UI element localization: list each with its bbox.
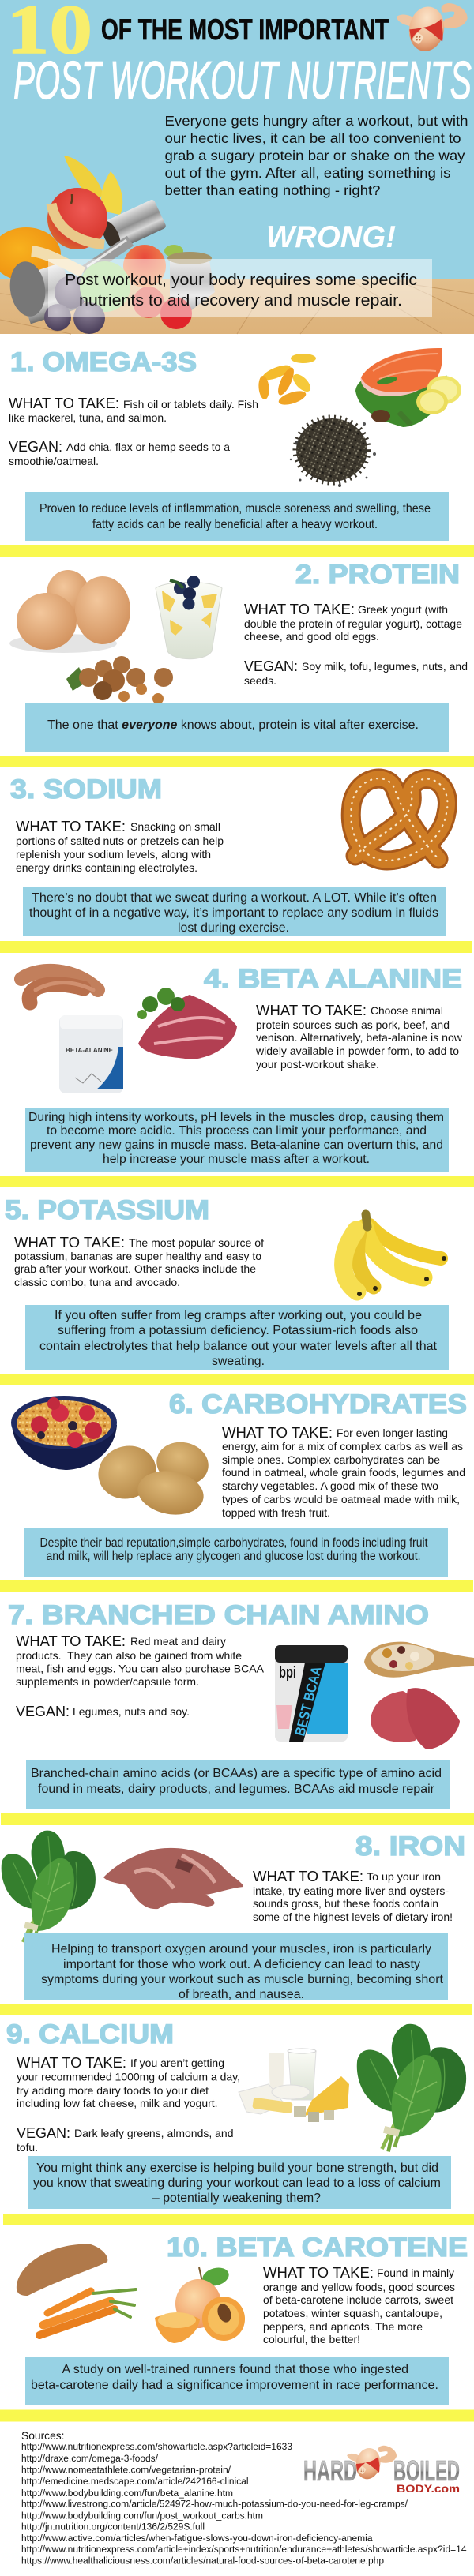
- panel: 9 calcium: [6, 2019, 466, 2209]
- what to take text: your recommended 1000mg of calcium a day,: [17, 2070, 240, 2083]
- callout: beta alanine benefit: help increase your muscle mass after a workout.: [103, 1153, 370, 1166]
- what to take text: Soy milk, tofu, legumes, nuts, and: [302, 660, 468, 673]
- what to take text: [263, 2265, 455, 2345]
- logo: hard boiled body: BODY.com: [397, 2482, 460, 2495]
- what to take text: try adding more dairy foods to your diet: [17, 2084, 209, 2097]
- what to take text: WHAT TO TAKE:: [17, 2055, 126, 2071]
- what to take text: potassium, bananas are super healthy and easy to: [14, 1250, 261, 1262]
- sources list: Sources:: [21, 2429, 65, 2442]
- what to take text: some of the highest levels of dietary iron!: [253, 1910, 453, 1923]
- what to take text: seeds.: [244, 674, 276, 687]
- sources list: http://www.nutritionexpress.com/showarticle.aspx?articleid=1633: [21, 2443, 292, 2452]
- what to take text: double the protein of regular yogurt), cottage: [244, 617, 462, 630]
- callout: iron benefit: Helping to transport oxygen around your muscles, iron is particularly: [51, 1942, 431, 1956]
- sources list: http://jn.nutrition.org/content/136/2/529S.full: [21, 2523, 205, 2533]
- what to take text: VEGAN:: [17, 2125, 70, 2141]
- callout: potassium benefit: suffering from a potassium deficiency. Potassium-rich foods also: [58, 1324, 418, 1337]
- what to take text: For even longer lasting: [337, 1427, 448, 1439]
- what to take text: WHAT TO TAKE:: [253, 1869, 363, 1884]
- heading: carbohydrates: 6. CARBOHYDRATES: [169, 1389, 467, 1419]
- panel: 7 branched chain amino: [8, 1600, 474, 1809]
- sources list: http://www.active.com/articles/when-fatigue-slows-you-down-iron-deficiency-anemia: [21, 2534, 373, 2544]
- callout: iron benefit: symptoms during your workout such as muscle burning, becoming short: [41, 1973, 444, 1986]
- what to take text: found in oatmeal, whole grain foods, legumes and: [222, 1466, 465, 1479]
- intro paragraph: better than eating nothing - right?: [164, 182, 381, 198]
- intro paragraph: out of the gym. After all, eating something is: [164, 165, 451, 181]
- callout: potassium benefit: [25, 1305, 449, 1370]
- what to take text: [14, 1235, 264, 1288]
- what to take text: topped with fresh fruit.: [222, 1506, 330, 1519]
- panel: 3 sodium: [10, 774, 447, 936]
- what to take text: simple ones. Complex carbohydrates can be: [222, 1453, 440, 1466]
- panel: 2 protein: [9, 560, 468, 752]
- what to take text: including low fat cheese, milk and yogurt.: [17, 2097, 218, 2109]
- icon: spoon of legumes: [364, 1642, 474, 1678]
- icon: fruit granola bowl: [11, 1396, 117, 1470]
- what to take text: colourful, the better!: [263, 2333, 360, 2345]
- what to take text: widely available in powder form, to add to: [255, 1044, 459, 1057]
- what to take text: [17, 2055, 240, 2154]
- what to take text: protein sources such as pork, beef, and: [256, 1018, 450, 1031]
- what to take text: To up your iron: [367, 1870, 441, 1883]
- what to take text: WHAT TO TAKE:: [16, 1633, 126, 1649]
- icon: red meat with parsley: [137, 988, 237, 1059]
- callout: beta alanine benefit: prevent any new gains in muscle mass. Beta-alanine can overturn this, and: [30, 1138, 443, 1152]
- icon: raw beef: [371, 1688, 460, 1749]
- heading: beta alanine: 4. BETA ALANINE: [204, 964, 462, 994]
- heading: calcium: 9. CALCIUM: [6, 2019, 174, 2049]
- what to take text: [253, 1869, 453, 1923]
- title line: of the most important: OF THE MOST IMPORTANT: [101, 13, 389, 46]
- heading: sodium: 3. SODIUM: [10, 774, 162, 804]
- what to take text: Red meat and dairy: [130, 1635, 226, 1648]
- icon: BCAA supplement tub: BEST BCAA: [292, 1665, 325, 1738]
- what to take text: products. They can also be gained from white: [16, 1649, 242, 1662]
- what to take text: Dark leafy greens, almonds, and: [74, 2127, 234, 2139]
- what to take text: [255, 1003, 463, 1071]
- sources list: http://www.nutritionexpress.com/article+index/sports+nutrition/endurance+athletes/showarticle.aspx?id=14: [21, 2545, 467, 2555]
- what to take text: types of carbs would be oatmeal made with milk,: [222, 1493, 460, 1505]
- what to take text: Legumes, nuts and soy.: [73, 1705, 190, 1718]
- logo: hard boiled body: [303, 2446, 460, 2495]
- intro paragraph: [164, 113, 468, 198]
- callout: beta carotene benefit: A study on well-trained runners found that those who ingested: [62, 2363, 408, 2376]
- callout: BCAA benefit: found in meats, dairy products, and legumes. BCAAs aid muscle repair: [38, 1783, 434, 1796]
- callout: omega-3 benefit: fatty acids can be really beneficial after a heavy workout.: [92, 518, 378, 531]
- callout: iron benefit: of breath, and nausea.: [179, 1988, 304, 2001]
- sources list: http://www.nomeatathlete.com/vegetarian-protein/: [21, 2466, 231, 2476]
- icon: sausages: [21, 971, 98, 1003]
- what to take text: [222, 1425, 465, 1519]
- icon: BCAA supplement tub: [275, 1645, 348, 1742]
- panel: header: [0, 0, 474, 334]
- what to take text: smoothie/oatmeal.: [9, 455, 99, 467]
- callout: calcium benefit: you know that sweating during your workout can lead to a loss of calcium: [33, 2177, 441, 2190]
- what to take text: WHAT TO TAKE:: [14, 1235, 125, 1251]
- what to take text: orange and yellow foods, good sources: [263, 2281, 455, 2293]
- callout: sodium benefit: lost during exercise.: [178, 921, 289, 935]
- what to take text: WHAT TO TAKE:: [263, 2265, 374, 2281]
- what to take text: [9, 396, 258, 467]
- callout: potassium benefit: contain electrolytes that help balance out your water levels after all that: [40, 1340, 438, 1353]
- what to take text: WHAT TO TAKE:: [244, 602, 355, 617]
- what to take text: VEGAN:: [9, 439, 62, 455]
- what to take text: If you aren’t getting: [130, 2057, 224, 2069]
- what to take text: Fish oil or tablets daily. Fish: [123, 398, 258, 411]
- heading: protein: 2. PROTEIN: [295, 560, 460, 590]
- icon: beta-alanine powder tub: [59, 1015, 123, 1093]
- what to take text: WHAT TO TAKE:: [256, 1003, 367, 1018]
- what to take text: Add chia, flax or hemp seeds to a: [66, 441, 230, 453]
- panel: 8 iron: [2, 1831, 465, 2001]
- heading: potassium: 5. POTASSIUM: [5, 1195, 209, 1225]
- what to take text: replenish your sodium levels, along with: [16, 848, 211, 861]
- illustration: fruit and dumbbells: [0, 156, 215, 334]
- what to take text: energy drinks containing electrolytes.: [16, 861, 198, 874]
- icon: potatoes: [91, 1438, 213, 1520]
- callout: iron benefit: important for those who work out. A deficiency can lead to nasty: [63, 1958, 420, 1971]
- panel: 6 carbohydrates: [11, 1389, 467, 1577]
- callout: BCAA benefit: Branched-chain amino acids (or BCAAs) are a specific type of amino acid: [31, 1767, 442, 1780]
- translucent message box: nutrients to aid recovery and muscle repair.: [79, 292, 402, 309]
- callout: carbohydrates benefit: Despite their bad reputation,simple carbohydrates, found in foods including fruit: [40, 1536, 428, 1550]
- what to take text: energy, aim for a mix of complex carbs as well as: [222, 1440, 463, 1453]
- icon: eggs: [9, 570, 130, 653]
- icon: dairy products: [239, 2049, 349, 2122]
- what to take text: cheese, and good old eggs.: [244, 630, 379, 643]
- callout: potassium benefit: If you often suffer from leg cramps after working out, you could be: [55, 1309, 422, 1322]
- icon: beta-alanine powder tub: BETA-ALANINE: [66, 1046, 113, 1054]
- what to take text: grab after your workout. Other snacks include the: [14, 1262, 256, 1275]
- icon: raw liver: [103, 1848, 243, 1909]
- icon: apricots: [155, 2265, 248, 2344]
- what to take text: supplements in powder/capsule form.: [16, 1675, 199, 1688]
- sources list: [21, 2429, 467, 2566]
- what to take text: Snacking on small: [130, 820, 220, 833]
- intro paragraph: our hectic lives, it can be all too convenient to: [164, 130, 461, 146]
- callout: sodium benefit: There’s no doubt that we sweat during a workout. A LOT. While it’s often: [32, 891, 437, 905]
- callout: calcium benefit: – potentially weakening them?: [152, 2192, 321, 2205]
- icon: BCAA supplement tub: bpi: [279, 1664, 296, 1682]
- callout: iron benefit: [24, 1933, 448, 2001]
- sources list: http://emedicine.medscape.com/article/242166-clinical: [21, 2477, 248, 2487]
- what to take text: [16, 819, 224, 874]
- what to take text: venison. Alternatively, beta-alanine is now: [256, 1031, 463, 1044]
- icon: spinach bunch: [2, 1831, 96, 1944]
- what to take text: Choose animal: [371, 1004, 443, 1017]
- callout: sodium benefit: [23, 887, 446, 936]
- what to take text: starchy vegetables. A good mix of these two: [222, 1479, 438, 1492]
- what to take text: your post-workout shake.: [256, 1058, 379, 1071]
- intro paragraph: grab a sugary protein bar or shake on the way: [164, 148, 465, 163]
- callout: carbohydrates benefit: [24, 1528, 448, 1577]
- what to take text: Found in mainly: [377, 2267, 454, 2279]
- sources list: https://www.healthaliciousness.com/articles/natural-food-sources-of-beta-carotene.php: [21, 2556, 384, 2566]
- what to take text: sounds gross, but these foods contain: [253, 1897, 438, 1910]
- sources list: http://draxe.com/omega-3-foods/: [21, 2454, 159, 2464]
- callout: carbohydrates benefit: and milk, will help replace any glycogen and glucose lost during the workout.: [46, 1550, 420, 1563]
- callout: beta alanine benefit: [25, 1108, 449, 1172]
- callout: beta carotene benefit: beta-carotene daily had a significance improvement in race performance.: [31, 2379, 438, 2392]
- icon: yogurt glass: [156, 576, 222, 659]
- icon: walnuts: [66, 656, 173, 704]
- callout: beta alanine benefit: During high intensity workouts, pH levels in the muscles drop, causing them: [28, 1111, 444, 1124]
- sources list: http://www.bodybuilding.com/fun/post_workout_carbs.htm: [21, 2512, 263, 2522]
- callout: BCAA benefit: [26, 1760, 450, 1809]
- panel: 10 beta carotene: [17, 2233, 468, 2405]
- callout: omega-3 benefit: Proven to reduce levels of inflammation, muscle soreness and swelling, these: [40, 502, 431, 516]
- what to take text: of beta-carotene include carrots, sweet: [263, 2293, 453, 2306]
- what to take text: WHAT TO TAKE:: [222, 1425, 333, 1441]
- callout: protein benefit: The one that everyone knows about, protein is vital after exercise.: [47, 718, 419, 732]
- icon: salmon steak with lemon: [356, 348, 461, 427]
- what to take text: VEGAN:: [244, 658, 298, 674]
- icon: muscle egg mascot: [397, 3, 468, 54]
- intro paragraph: Everyone gets hungry after a workout, but with: [164, 113, 468, 129]
- heading: beta carotene: 10. BETA CAROTENE: [167, 2233, 468, 2263]
- icon: chia seeds: [290, 418, 376, 487]
- what to take text: meat, fish and eggs. You can also purchase BCAA: [16, 1663, 265, 1675]
- logo: hard boiled body: HARD: [303, 2454, 357, 2487]
- panel: 4 beta alanine: [21, 964, 463, 1172]
- what to take text: like mackerel, tuna, and salmon.: [9, 411, 167, 424]
- callout: beta carotene benefit: [25, 2357, 449, 2405]
- translucent message box: [48, 259, 432, 317]
- icon: sweet potato: [17, 2244, 107, 2296]
- callout: beta alanine benefit: to become more acidic. This process can limit your performance, and: [47, 1124, 427, 1138]
- callout: potassium benefit: sweating.: [212, 1355, 265, 1368]
- panel: 1 omega-3s: [9, 347, 461, 541]
- translucent message box: Post workout, your body requires some specific: [65, 272, 417, 289]
- what to take text: classic combo, tuna and avocado.: [14, 1276, 180, 1288]
- what to take text: VEGAN:: [16, 1704, 70, 1719]
- callout: sodium benefit: thought of in a negative way, it’s important to replace any sodium in fluids: [29, 906, 438, 920]
- sources list: http://www.bodybuilding.com/fun/beta_alanine.htm: [21, 2489, 233, 2499]
- what to take text: Greek yogurt (with: [358, 603, 448, 616]
- icon: fish oil capsules: [258, 354, 316, 407]
- callout: calcium benefit: [28, 2156, 451, 2209]
- what to take text: [16, 1633, 265, 1719]
- what to take text: portions of salted nuts or pretzels can help: [16, 834, 224, 847]
- icon: carrots: [40, 2289, 136, 2335]
- what to take text: WHAT TO TAKE:: [9, 396, 119, 411]
- what to take text: [244, 602, 468, 687]
- wrong callout: WRONG!: [266, 220, 396, 254]
- callout: protein benefit: [25, 703, 449, 752]
- icon: salted pretzel: [351, 778, 447, 861]
- callout: omega-3 benefit: [25, 492, 449, 541]
- callout: calcium benefit: You might think any exercise is helping build your bone strength, but did: [36, 2162, 438, 2175]
- heading: iron: 8. IRON: [356, 1832, 465, 1862]
- what to take text: WHAT TO TAKE:: [16, 819, 126, 834]
- what to take text: peppers, and apricots. The more: [263, 2320, 423, 2333]
- heading: branched chain amino: 7. BRANCHED CHAIN AMINO: [8, 1600, 429, 1630]
- heading: omega-3s: 1. OMEGA-3S: [10, 347, 197, 377]
- sources list: http://www.livestrong.com/article/524972-how-much-potassium-do-you-need-for-leg-cramps/: [21, 2499, 408, 2509]
- what to take text: potatoes, winter squash, cantaloupe,: [263, 2307, 442, 2319]
- panel: 5 potassium: [5, 1195, 449, 1370]
- icon: spinach bunch: [357, 2024, 466, 2151]
- what to take text: tofu.: [17, 2141, 38, 2154]
- icon: bananas: [344, 1214, 446, 1296]
- what to take text: The most popular source of: [129, 1236, 264, 1249]
- what to take text: intake, try eating more liver and oysters-: [253, 1884, 449, 1897]
